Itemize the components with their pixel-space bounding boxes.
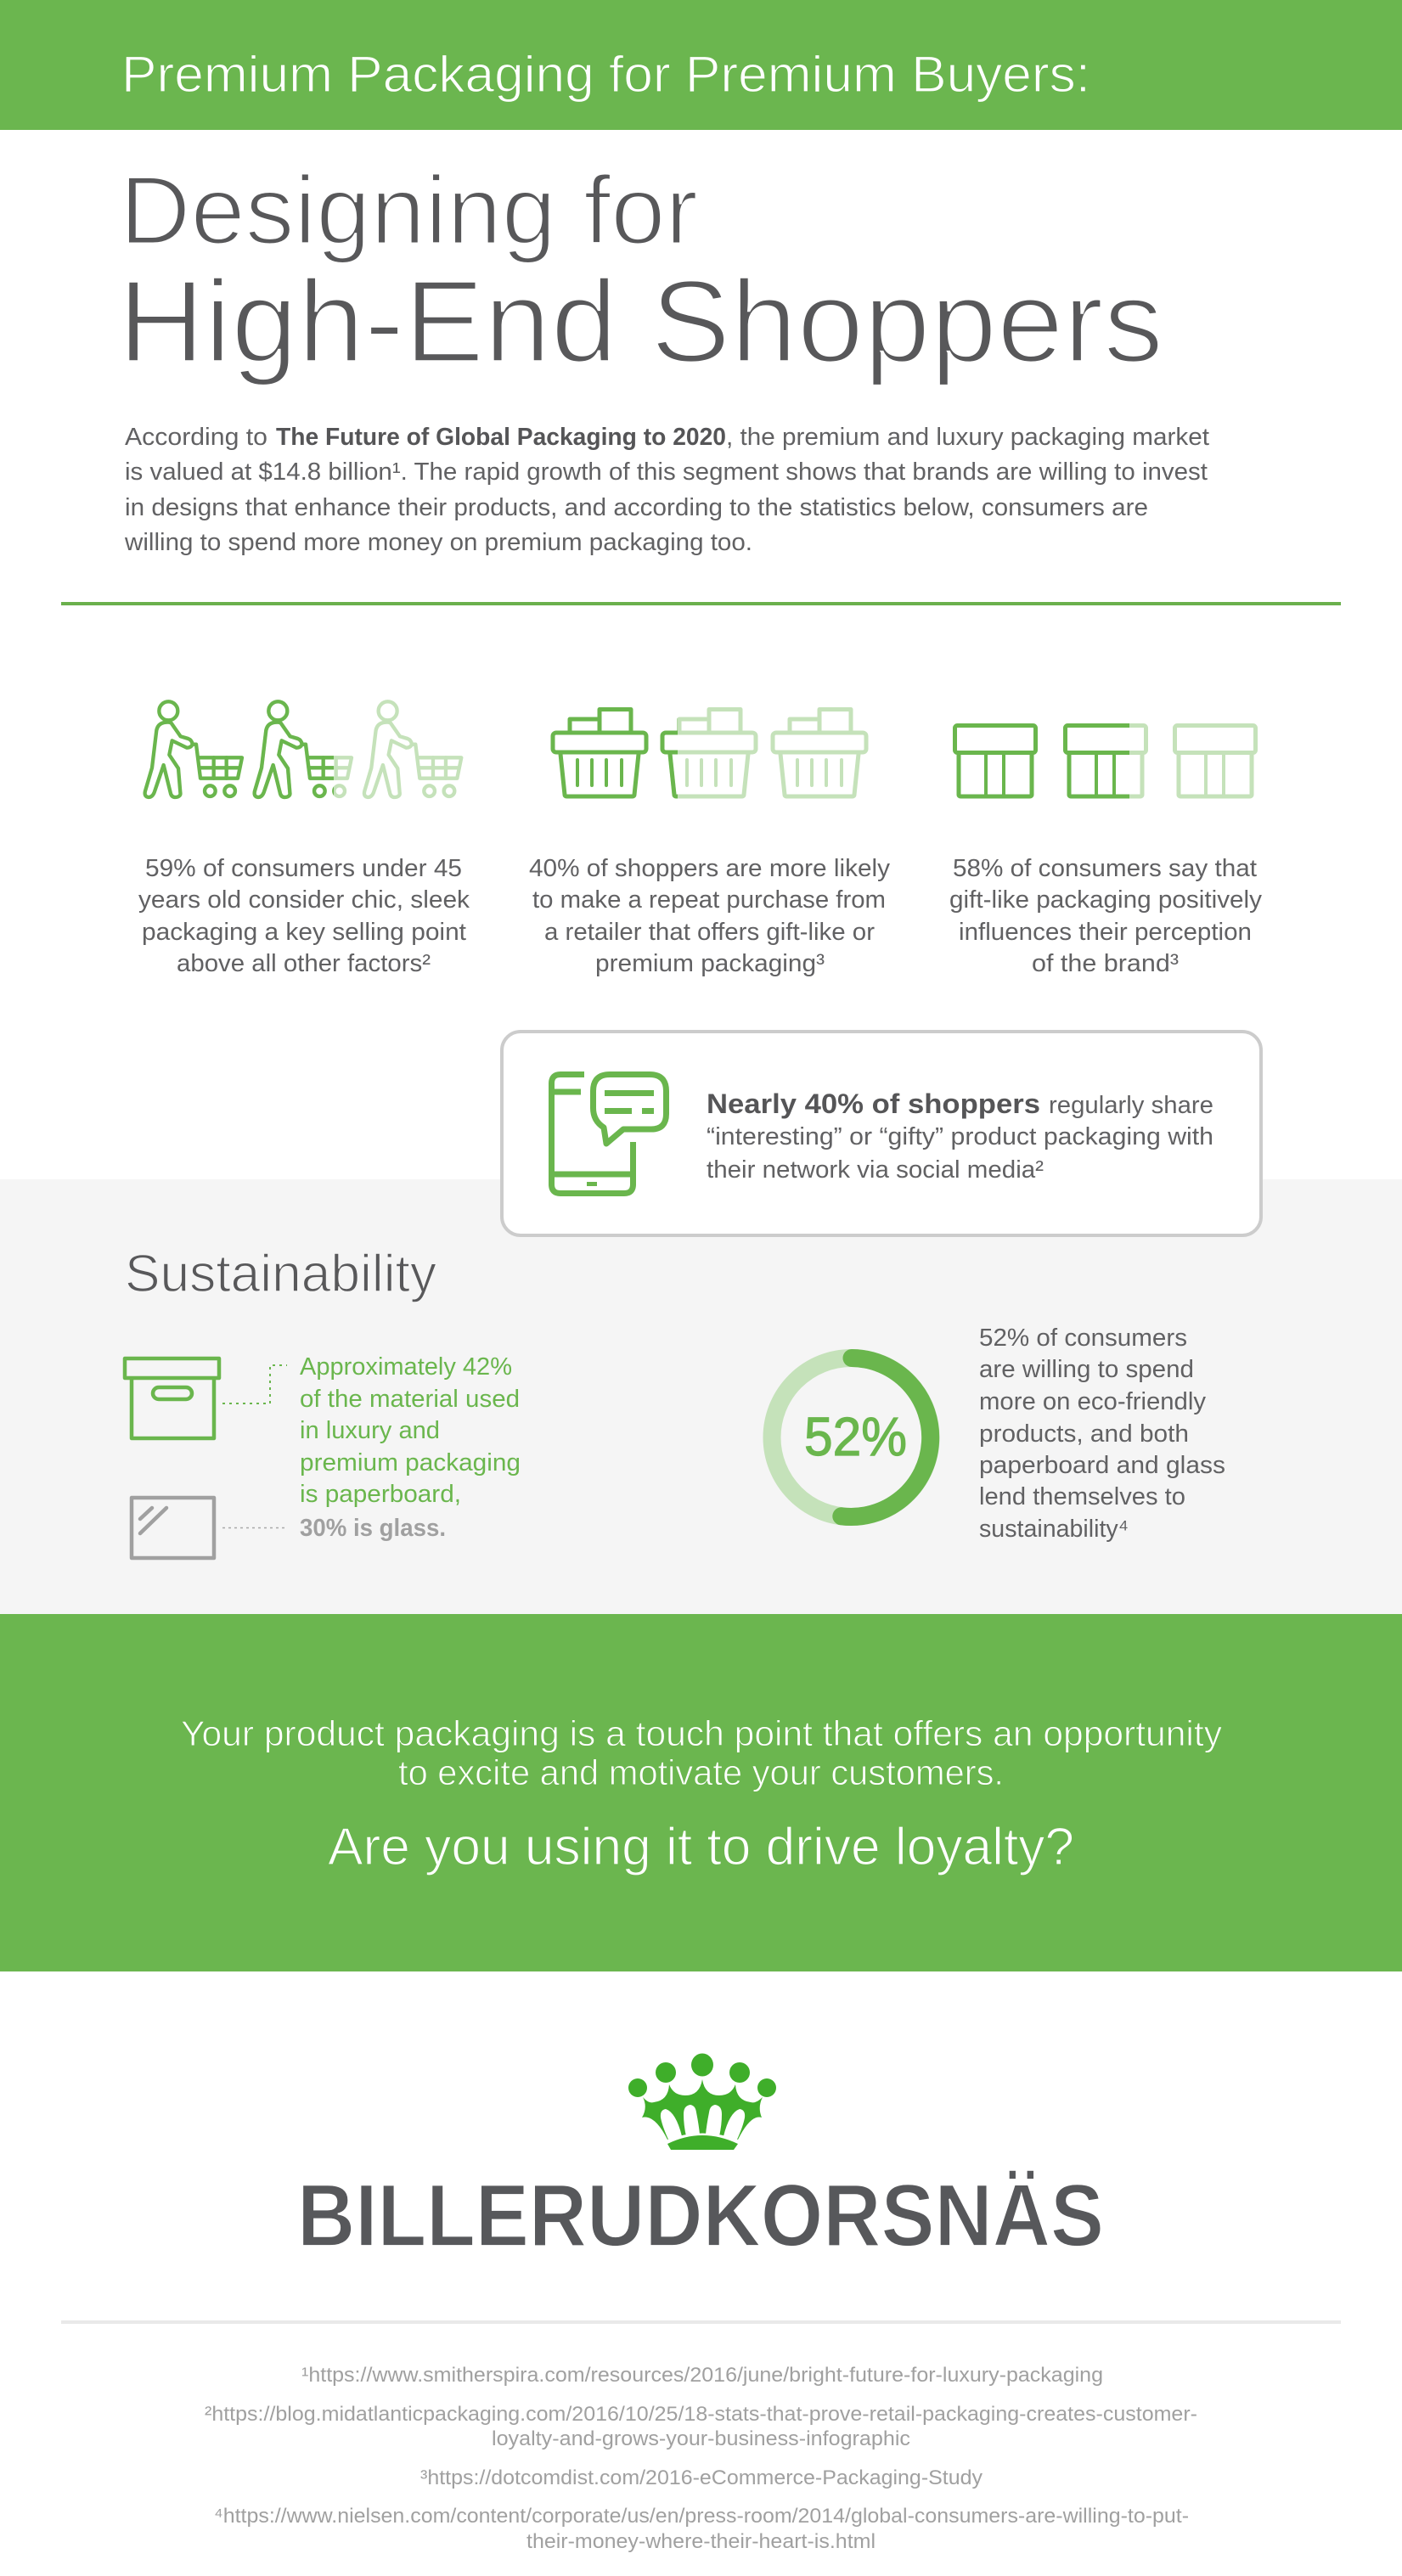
material share text: 30% is glass. [300,1515,446,1542]
eco-friendly text: paperboard and glass [979,1452,1225,1479]
call-to-action band: Your product packaging is a touch point that offers an opportunity [181,1713,1222,1753]
stat text: 58% of consumers [949,855,1262,977]
material share text: Approximately 42% [300,1353,512,1381]
intro paragraph [124,424,1209,556]
eco-friendly text: lend themselves to [979,1483,1185,1510]
material share text: of the material used [300,1386,520,1413]
eco-friendly text: more on eco-friendly [979,1388,1207,1415]
stat text: 40% of shoppers: premium packaging³ [595,950,825,977]
material share text: premium packaging [300,1449,521,1476]
eco-friendly text: sustainability⁴ [979,1516,1129,1543]
material share text: in luxury and [300,1417,440,1444]
stat text: 58% of consumers: 58% of consumers say that [953,855,1257,882]
intro paragraph: The Future of Global Packaging to 2020 [276,424,726,451]
footnotes: ²https://blog.midatlanticpackaging.com/2016/10/25/18-stats-that-prove-retail-packaging-creates-customer- [205,2403,1197,2426]
callout text: Nearly 40% of shoppers [707,1088,1040,1119]
title [118,157,1163,387]
call-to-action band: to excite and motivate your customers. [398,1752,1004,1792]
icons: shoppers with carts (59%) [145,701,461,797]
stat text: 40% of shoppers: a retailer that offers gift-like or [544,919,875,946]
heading: Sustainability: Sustainability [125,1245,436,1303]
callout: social sharing [502,1032,1261,1235]
call-to-action band: Are you using it to drive loyalty? [328,1818,1074,1876]
intro paragraph: willing to spend more money on premium packaging too. [124,529,752,556]
material share text: is paperboard, [300,1481,461,1508]
connector: glass [222,1527,287,1528]
intro paragraph: According to [125,424,267,451]
callout text: their network via social media² [707,1156,1044,1184]
eco-friendly text: are willing to spend [979,1356,1194,1383]
icons: gift boxes (58%) [954,725,1255,796]
call-to-action band [0,1614,1402,1971]
intro paragraph: is valued at $14.8 billion¹. The rapid growth of this segment shows that brands are willing to invest [125,458,1208,486]
logo: wordmark: BILLERUDKORSNÄS [297,2167,1104,2265]
icons: baskets (40%) [553,710,866,796]
stat text: 58% of consumers: of the brand³ [1032,950,1179,977]
header subtitle: Premium Packaging for Premium Buyers: [121,46,1090,103]
connector: paperboard [222,1365,287,1403]
intro paragraph: in designs that enhance their products, and according to the statistics below, consumers are [125,494,1148,521]
icon: paperboard box [125,1358,219,1438]
donut chart: 52%: 52% [804,1406,907,1467]
callout text [707,1088,1213,1184]
footnotes: their-money-where-their-heart-is.html [526,2530,876,2553]
material share text [300,1353,521,1542]
donut chart: 52% [772,1358,931,1516]
stat text: 40% of shoppers [529,855,891,977]
logo: crown [628,2053,776,2150]
title: High-End Shoppers [118,256,1163,387]
header band [0,0,1402,130]
icon: phone with speech bubble [551,1075,666,1194]
footnotes: ³https://dotcomdist.com/2016-eCommerce-Packaging-Study [420,2466,983,2489]
stat text: 59% of consumers: packaging a key selling point [142,919,466,946]
callout text: regularly share [1049,1092,1213,1119]
stat text: 40% of shoppers: 40% of shoppers are more likely [529,855,891,882]
stat text: 58% of consumers: influences their perception [959,919,1252,946]
icon: glass pane [132,1498,214,1558]
footnotes: ⁴https://www.nielsen.com/content/corporate/us/en/press-room/2014/global-consumers-are-willing-to-put- [214,2505,1189,2528]
intro paragraph: , the premium and luxury packaging market [726,424,1209,451]
stat text: 59% of consumers: years old consider chic, sleek [138,886,470,914]
stat text: 59% of consumers: 59% of consumers under 45 [145,855,462,882]
footnotes [205,2364,1197,2553]
stat text: 58% of consumers: gift-like packaging positively [949,886,1262,914]
stat text: 59% of consumers [138,855,470,977]
title: Designing for [120,157,698,265]
callout text: “interesting” or “gifty” product packaging with [707,1123,1213,1150]
eco-friendly text: products, and both [979,1420,1189,1448]
stat text: 40% of shoppers: to make a repeat purchase from [532,886,886,914]
stat text: 59% of consumers: above all other factors² [177,950,431,977]
sustainability background panel [0,1179,1402,1614]
eco-friendly text: 52% of consumers [979,1325,1187,1352]
eco-friendly text [979,1325,1225,1543]
footnotes: loyalty-and-grows-your-business-infographic [492,2427,910,2450]
footnotes: ¹https://www.smitherspira.com/resources/2016/june/bright-future-for-luxury-packaging [301,2364,1103,2387]
